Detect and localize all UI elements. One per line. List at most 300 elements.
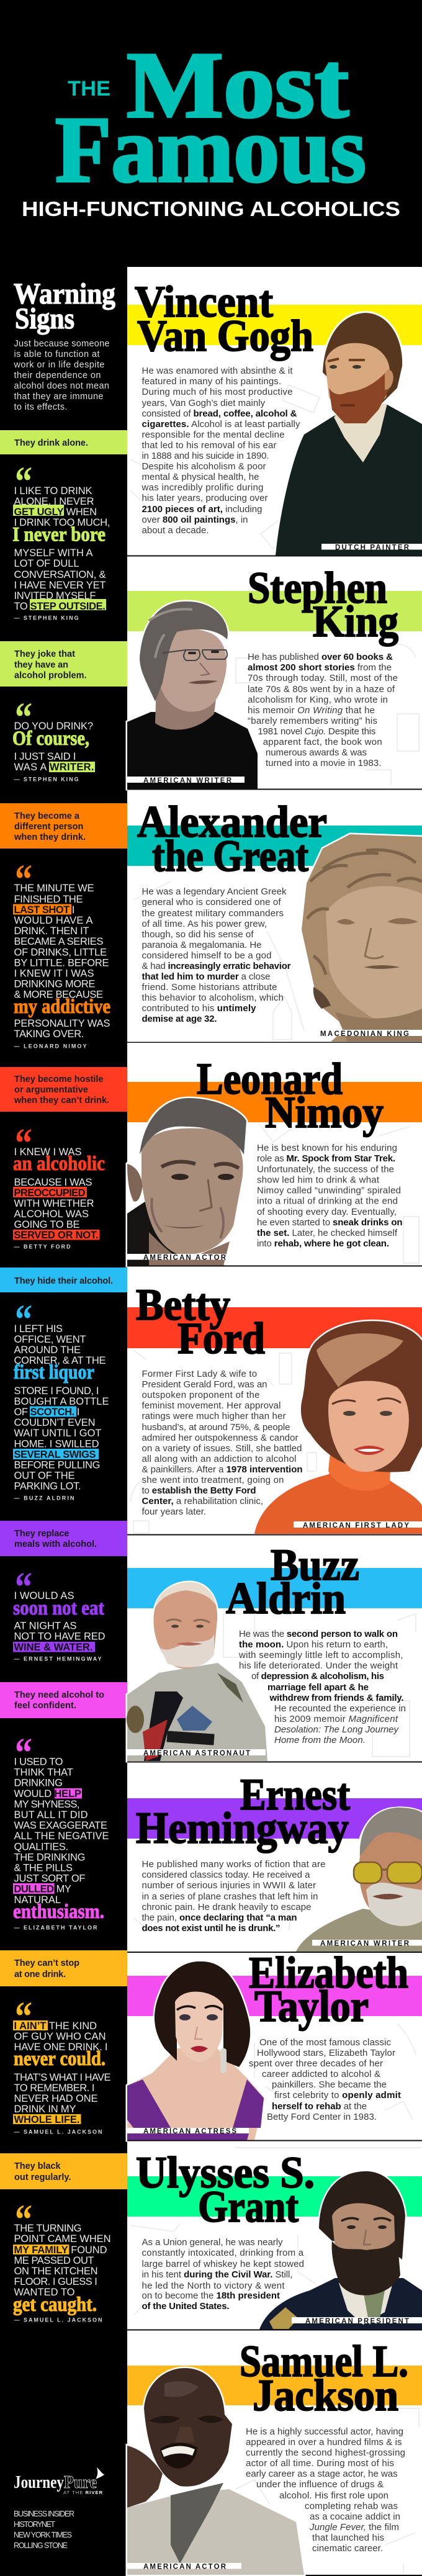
- text block: Grant bio: in his tent during the Civil War. Still,: [141, 2269, 293, 2280]
- sign 2: they joke: WAS A WRITER.: [14, 762, 94, 773]
- sign 6: replace meals: They replace: [14, 1529, 70, 1539]
- sign 3: different person: — LEONARD NIMOY: [14, 1043, 87, 1049]
- sign 4: hostile: an alcoholic: [13, 1153, 105, 1175]
- text block: Van Gogh bio: featured in many of his paintings.: [141, 376, 281, 387]
- sign 5: hide alcohol: I LEFT HIS: [14, 1323, 63, 1335]
- label: American astronaut: AMERICAN ASTRONAUT: [143, 1750, 250, 1757]
- sign 8: can't stop: I AIN’T THE KIND: [14, 2020, 97, 2032]
- sign 6: replace meals: “: [15, 1563, 32, 1610]
- label: Dutch painter: DUTCH PAINTER: [335, 544, 410, 551]
- sign 6: replace meals: meals with alcohol.: [14, 1539, 97, 1549]
- sources: BUSINESS INSIDER: [14, 2510, 74, 2518]
- panel: Leonard Nimoy: [127, 1043, 422, 1266]
- warning signs intro: Signs: [15, 302, 74, 335]
- text block: Aldrin bio: his life deteriorated. Under the weight: [239, 1660, 398, 1671]
- sign 4: hostile: GOING TO BE: [14, 1219, 79, 1230]
- sign 5: hide alcohol: “: [15, 1295, 32, 1343]
- panel: Leonard Nimoy: Nimoy: [265, 1088, 384, 1137]
- sign 7: need confidence: MY SHYNESS,: [14, 1799, 79, 1810]
- panel: Samuel L. Jackson: Jackson: [253, 2371, 398, 2420]
- logo: JourneyPure at the River: Pure: [64, 2472, 97, 2492]
- text block: Betty Ford bio: on a variety of issues. Still, she battled: [141, 1443, 302, 1454]
- text block: King bio: almost 200 short stories from the: [248, 662, 392, 673]
- text block: King bio: [248, 652, 398, 768]
- label: Macedonian king: MACEDONIAN KING: [320, 1030, 409, 1038]
- text block: Alexander bio: considered himself to be a god: [141, 950, 272, 961]
- text block: King bio: He has published over 60 books &: [248, 652, 393, 662]
- panel: Vincent Van Gogh: Vincent: [135, 277, 273, 327]
- text block: Aldrin bio: He recounted the experience in: [274, 1703, 406, 1714]
- sign 8: can't stop: THAT’S WHAT I HAVE: [14, 2072, 110, 2083]
- label: American first lady: AMERICAN FIRST LADY: [303, 1522, 409, 1529]
- text block: Alexander bio: the greatest military commanders: [141, 908, 284, 919]
- sign 3: different person: They become a: [14, 811, 80, 821]
- text block: Taylor bio: One of the most famous classic: [259, 2037, 391, 2048]
- sign 2: they joke: “: [15, 693, 32, 741]
- text block: Aldrin bio: He was the second person to walk on: [239, 1629, 398, 1639]
- text block: Grant bio: As a Union general, he was nearly: [141, 2237, 283, 2248]
- label: American actor: [127, 2563, 241, 2571]
- sign 7: need confidence: WOULD HELP: [14, 1788, 81, 1799]
- sign 1: they drink alone: TO STEP OUTSIDE.: [14, 601, 106, 612]
- panel: Alexander the Great: the Great: [152, 831, 308, 881]
- sign 1: they drink alone: ALONE. I NEVER: [14, 496, 94, 507]
- text block: Jackson bio: Jungle Fever, the film: [309, 2522, 399, 2533]
- panel: Samuel L. Jackson: [127, 2330, 422, 2575]
- sign 4: hostile: PREOCCUPIED: [14, 1187, 86, 1199]
- sign 9: black out: WANTED TO: [14, 2287, 75, 2298]
- text block: Jackson bio: cinematic career.: [312, 2543, 383, 2554]
- sign 9: black out: MY FAMILY FOUND: [14, 2245, 107, 2256]
- sign 1: they drink alone: I HAVE NEVER YET: [14, 580, 106, 591]
- sign 4: hostile: ALCOHOL WAS: [14, 1209, 89, 1220]
- text block: Jackson bio: He is a highly successful actor, having: [246, 2426, 403, 2437]
- text block: Aldrin bio: of depression & alcoholism, his: [251, 1671, 384, 1682]
- sign 1: they drink alone: I never bore: [12, 524, 106, 546]
- sign 4: hostile: I KNEW I WAS: [14, 1146, 82, 1158]
- text block: Jackson bio: currently the second highest-grossing: [246, 2448, 405, 2458]
- text block: Taylor bio: painkillers. She became the: [272, 2079, 387, 2090]
- panel: Betty Ford: [127, 1266, 422, 1536]
- title: Famous: [55, 97, 366, 202]
- text block: Aldrin bio: withdrew from friends & family.: [269, 1693, 403, 1703]
- text block: Grant bio: [141, 2237, 304, 2312]
- sign 9: black out: [0, 2153, 127, 2323]
- logo: JourneyPure at the River: Journey: [14, 2472, 64, 2492]
- sign 8: can't stop: OF GUY WHO CAN: [14, 2031, 106, 2042]
- panel: Ernest Hemingway: Hemingway: [136, 1803, 349, 1853]
- sign 2: they joke: Of course,: [12, 727, 89, 750]
- logo: JourneyPure at the River: AT THE RIVER: [63, 2490, 103, 2495]
- sign 4: hostile: BECAUSE I WAS: [14, 1177, 92, 1188]
- text block: Hemingway bio: considered classics today. He received a: [141, 1870, 310, 1880]
- text block: Van Gogh bio: years, Van Gogh’s diet mainly: [141, 398, 266, 408]
- text block: Betty Ford bio: President Gerald Ford, was an: [141, 1379, 267, 1390]
- sign 4: hostile: when they can’t drink.: [14, 1096, 109, 1106]
- text block: Taylor bio: career addicted to alcohol &: [262, 2069, 380, 2079]
- text block: Taylor bio: first celebrity to openly admit: [274, 2090, 401, 2101]
- sign 3: different person: BECAME A SERIES: [14, 936, 103, 947]
- text block: King bio: turned into a movie in 1983.: [266, 758, 381, 768]
- panel: Ulysses S. Grant: Grant: [198, 2182, 299, 2231]
- sign 6: replace meals: [0, 1521, 127, 1662]
- sign 8: can't stop: TO REMEMBER. I: [14, 2083, 94, 2094]
- text block: Alexander bio: of all time. As his power grew,: [141, 919, 267, 929]
- title: Most: [127, 33, 349, 137]
- sign 5: hide alcohol: COULDN’T EVEN: [14, 1417, 96, 1428]
- text block: Grant bio: constantly intoxicated, drinking from a: [141, 2248, 304, 2258]
- text block: Jackson bio: [246, 2426, 405, 2554]
- sign 9: black out: — SAMUEL L. JACKSON: [14, 2317, 102, 2323]
- text block: Aldrin bio: marriage fell apart & he: [267, 1682, 369, 1693]
- text block: Alexander bio: this behavior to alcoholism, which: [141, 993, 284, 1003]
- sign 4: hostile: SERVED OR NOT.: [14, 1230, 98, 1241]
- text block: Betty Ford bio: admired her outspokenness & candor: [141, 1433, 298, 1443]
- label: American actress: AMERICAN ACTRESS: [143, 2128, 236, 2135]
- portrait: Ulysses S. Grant: [259, 2171, 422, 2330]
- sign 8: can't stop: HAVE ONE DRINK. I: [14, 2042, 108, 2053]
- text block: Hemingway bio: He published many works of fiction that are: [141, 1859, 325, 1870]
- warning signs intro: alcohol does not mean: [14, 381, 109, 391]
- text block: Aldrin bio: the moon. Upon his return to earth,: [239, 1639, 388, 1650]
- sign 7: need confidence: THE DRINKING: [14, 1852, 86, 1863]
- text block: Nimoy bio: He is best known for his enduring: [257, 1143, 397, 1153]
- text block: Alexander bio: He was a legendary Ancient Greek: [141, 886, 287, 897]
- sign 9: black out: get caught.: [13, 2294, 97, 2316]
- text block: Hemingway bio: number of serious injuries in WWII & later: [141, 1880, 316, 1891]
- sources: NEW YORK TIMES: [14, 2531, 72, 2539]
- text block: Hemingway bio: [141, 1859, 325, 1934]
- text block: Betty Ford bio: feminist movement. Her approval: [141, 1400, 281, 1411]
- text block: Nimoy bio: Unfortunately, the success of the: [257, 1164, 394, 1174]
- text block: Nimoy bio: into rehab, where he got clean.: [257, 1238, 389, 1249]
- panel: Buzz Aldrin: [127, 1536, 422, 1763]
- panel: Stephen King: Stephen: [248, 563, 387, 613]
- portrait: Ernest Hemingway: [296, 1808, 422, 1952]
- label: American actor: AMERICAN ACTOR: [143, 2564, 227, 2571]
- text block: Van Gogh bio: Despite his alcoholism & poor: [141, 461, 266, 472]
- text block: Grant bio: of the United States.: [141, 2301, 230, 2312]
- text block: Nimoy bio: show led him to drink & what: [257, 1174, 380, 1186]
- sign 5: hide alcohol: OF SCOTCH. I: [14, 1407, 79, 1418]
- text block: Nimoy bio: Nimoy called “unwinding” spiraled: [257, 1186, 401, 1196]
- sign 6: replace meals: I WOULD AS: [14, 1590, 74, 1601]
- text block: Jackson bio: alcohol. His first role upon: [279, 2490, 388, 2501]
- text block: King bio: 70s through today. Still, most of the: [248, 673, 398, 683]
- text block: Aldrin bio: Home from the Moon.: [274, 1735, 366, 1745]
- label: American writer: AMERICAN WRITER: [320, 1940, 410, 1948]
- sign 5: hide alcohol: SEVERAL SWIGS: [14, 1449, 96, 1460]
- text block: Taylor bio: spent over three decades of her: [249, 2058, 383, 2069]
- text block: Alexander bio: though, so did his sense of: [141, 929, 254, 940]
- sign 5: hide alcohol: HOME. I SWILLED: [14, 1439, 99, 1450]
- text block: Aldrin bio: with seemingly little left to accomplish,: [238, 1650, 403, 1660]
- text block: Van Gogh bio: in 1888 and his suicide in 1890.: [141, 451, 269, 461]
- sign 7: need confidence: JUST SORT OF: [14, 1873, 86, 1885]
- sign 7: need confidence: & THE PILLS: [14, 1862, 73, 1873]
- text block: Alexander bio: contributed to his untimely: [141, 1003, 256, 1014]
- panel: Alexander the Great: [127, 790, 422, 1043]
- sign 6: replace meals: — ERNEST HEMINGWAY: [14, 1656, 102, 1662]
- portrait: Betty Ford: [254, 1321, 422, 1534]
- sources: [14, 2510, 74, 2550]
- text block: Jackson bio: appeared in over a hundred films & is: [246, 2437, 402, 2448]
- sign 5: hide alcohol: They hide their alcohol.: [14, 1276, 113, 1286]
- title: [22, 33, 400, 220]
- sign 5: hide alcohol: BEFORE PULLING: [14, 1460, 101, 1471]
- text block: Betty Ford bio: outspoken proponent of the: [141, 1390, 259, 1400]
- text block: King bio: 1981 novel Cujo. Despite this: [258, 726, 375, 737]
- sign 9: black out: out regularly.: [14, 2173, 71, 2182]
- sign 7: need confidence: THINK THAT: [14, 1767, 73, 1778]
- sign 5: hide alcohol: AROUND THE: [14, 1344, 81, 1356]
- sign 4: hostile: — BETTY FORD: [14, 1244, 71, 1250]
- panel: Ulysses S. Grant: Ulysses S.: [136, 2148, 315, 2197]
- text block: Jackson bio: as a cocaine addict in: [310, 2511, 400, 2522]
- sign 3: different person: THE MINUTE WE: [14, 883, 94, 894]
- warning signs intro: that they are immune: [14, 392, 103, 402]
- sign 7: need confidence: “: [15, 1729, 32, 1776]
- label: American writer: AMERICAN WRITER: [143, 777, 232, 785]
- text block: Jackson bio: actor of all time. During most of his: [246, 2458, 394, 2469]
- sign 8: can't stop: — SAMUEL L. JACKSON: [14, 2129, 102, 2135]
- sign 2: they joke: — STEPHEN KING: [14, 776, 78, 782]
- text block: Taylor bio: [249, 2037, 401, 2122]
- sign 3: different person: DRINK. THEN IT: [14, 925, 89, 937]
- text block: King bio: “barely remembers writing” his: [248, 716, 377, 726]
- text block: Aldrin bio: [238, 1629, 406, 1745]
- panel: Stephen King: King: [313, 597, 398, 646]
- text block: Alexander bio: that led him to murder a close: [141, 971, 271, 982]
- text block: Alexander bio: friend. Some historians attribute: [141, 982, 277, 993]
- sign 2: they joke: I JUST SAID I: [14, 751, 76, 762]
- sign 1: they drink alone: MYSELF WITH A: [14, 547, 93, 559]
- text block: Jackson bio: under the influence of drugs &: [256, 2479, 384, 2490]
- sign 8: can't stop: DRINK IN MY: [14, 2104, 76, 2115]
- sign 1: they drink alone: [0, 430, 127, 621]
- portrait: Samuel L. Jackson: [127, 2368, 304, 2575]
- portrait: Van Gogh: [276, 313, 422, 556]
- sign 3: different person: [0, 803, 127, 1049]
- panel: Ulysses S. Grant: [127, 2141, 422, 2330]
- text block: Van Gogh bio: [141, 366, 300, 536]
- text block: Hemingway bio: the pain, once declaring that “a man: [141, 1912, 297, 1923]
- text block: Van Gogh bio: He was enamored with absinthe & it: [141, 366, 293, 376]
- sign 2: they joke: alcohol problem.: [14, 670, 87, 680]
- panel: Betty Ford: Betty: [136, 1280, 230, 1330]
- sign 4: hostile: [0, 1067, 127, 1250]
- text block: King bio: late 70s & 80s went by in a haze of: [248, 684, 395, 695]
- panel: Alexander the Great: Alexander: [137, 797, 327, 847]
- sign 3: different person: “: [15, 855, 32, 903]
- panel: Leonard Nimoy: Leonard: [197, 1054, 343, 1104]
- sign 3: different person: I KNEW IT I WAS: [14, 968, 94, 980]
- panel: Ernest Hemingway: [127, 1763, 422, 1953]
- text block: Alexander bio: demise at age 32.: [141, 1014, 217, 1024]
- text block: Van Gogh bio: over 800 oil paintings, in: [141, 515, 248, 525]
- text block: Betty Ford bio: all along with an addiction to alcohol: [141, 1454, 297, 1464]
- sign 9: black out: They black: [14, 2161, 61, 2171]
- text block: Van Gogh bio: his later years, producing over: [141, 493, 268, 503]
- sign 5: hide alcohol: BOUGHT A BOTTLE: [14, 1396, 109, 1407]
- sign 8: can't stop: “: [15, 1993, 32, 2040]
- sign 1: they drink alone: LOT OF DULL: [14, 558, 79, 569]
- sign 9: black out: POINT CAME WHEN: [14, 2233, 110, 2245]
- text block: Hemingway bio: in a series of plane crashes that left him in: [141, 1891, 318, 1902]
- sign 3: different person: OF DRINKS, LITTLE: [14, 947, 107, 958]
- text block: Jackson bio: early career as a stage actor, he was: [246, 2469, 398, 2479]
- sign 7: need confidence: enthusiasm.: [13, 1901, 104, 1923]
- sign 7: need confidence: DRINKING: [14, 1778, 63, 1789]
- sign 1: they drink alone: — STEPHEN KING: [14, 615, 78, 621]
- sign 7: need confidence: QUALITIES.: [14, 1841, 68, 1852]
- sources: ROLLING STONE: [14, 2541, 68, 2550]
- sign 8: can't stop: They can’t stop: [14, 1958, 79, 1968]
- text block: Taylor bio: Hollywood stars, Elizabeth Taylor: [257, 2048, 395, 2058]
- panel: Elizabeth Taylor: Taylor: [254, 1981, 369, 2031]
- sign 5: hide alcohol: — BUZZ ALDRIN: [14, 1495, 74, 1501]
- text block: Alexander bio: [141, 886, 291, 1024]
- sign 8: can't stop: at one drink.: [14, 1970, 66, 1979]
- sign 5: hide alcohol: OUT OF THE: [14, 1470, 74, 1481]
- sign 8: can't stop: NEVER HAD ONE: [14, 2093, 98, 2104]
- sign 2: they joke: they have an: [14, 660, 68, 670]
- sign 3: different person: DRINKING MORE: [14, 978, 96, 989]
- sign 3: different person: LAST SHOT I: [14, 904, 74, 916]
- panel: Betty Ford: Ford: [177, 1313, 265, 1363]
- warning signs intro: [14, 277, 115, 412]
- sign 7: need confidence: [0, 1682, 127, 1930]
- sign 1: they drink alone: “: [15, 457, 32, 505]
- warning signs intro: their dependence on: [14, 371, 101, 381]
- text block: Betty Ford bio: husband’s, at around 75%, & people: [141, 1422, 290, 1433]
- text block: Van Gogh bio: that led to his removal of his ear: [141, 440, 277, 451]
- text block: Aldrin bio: his 2009 memoir Magnificent: [274, 1714, 398, 1724]
- text block: Van Gogh bio: mental & physical health, he: [141, 472, 259, 482]
- title: THE: [68, 77, 110, 101]
- warning signs intro: is able to function at: [14, 349, 99, 359]
- panel: Stephen King: [127, 556, 422, 790]
- sign 7: need confidence: They need alcohol to: [14, 1690, 104, 1700]
- text block: Alexander bio: general who is considered one of: [141, 897, 281, 907]
- portrait: Alexander statue: [302, 834, 422, 1042]
- sign 5: hide alcohol: CORNER, & AT THE: [14, 1355, 106, 1366]
- label: American writer: [127, 777, 245, 785]
- sign 1: they drink alone: CONVERSATION, &: [14, 569, 106, 580]
- sign 2: they joke: DO YOU DRINK?: [14, 721, 93, 732]
- sign 4: hostile: or argumentative: [14, 1085, 88, 1095]
- sign 9: black out: ON THE KITCHEN: [14, 2266, 98, 2277]
- sign 3: different person: different person: [14, 822, 83, 832]
- sign 6: replace meals: soon not eat: [13, 1597, 104, 1619]
- sign 5: hide alcohol: STORE I FOUND, I: [14, 1385, 99, 1397]
- text block: King bio: apparent fact, the book won: [263, 737, 382, 747]
- text block: King bio: his memoir On Writing that he: [248, 705, 375, 716]
- text block: Van Gogh bio: consisted of bread, coffee, alcohol &: [141, 408, 297, 419]
- text block: Van Gogh bio: was incredibly prolific during: [141, 482, 263, 493]
- text block: Betty Ford bio: four years later.: [141, 1506, 206, 1517]
- sign 7: need confidence: BUT ALL IT DID: [14, 1809, 88, 1821]
- sign 3: different person: FINISHED THE: [14, 894, 83, 905]
- sign 7: need confidence: feel confident.: [14, 1701, 76, 1711]
- text block: Jackson bio: that launched his: [312, 2533, 384, 2543]
- text block: King bio: numerous awards & was: [266, 747, 367, 758]
- text block: Jackson bio: completing rehab was: [305, 2501, 398, 2511]
- sign 1: they drink alone: I LIKE TO DRINK: [14, 485, 92, 497]
- panel: Ernest Hemingway: Ernest: [240, 1770, 350, 1819]
- sign 6: replace meals: WINE & WATER.: [14, 1642, 93, 1653]
- text block: Grant bio: he led the North to victory & went: [141, 2281, 285, 2291]
- warning signs intro: to its effects.: [14, 402, 67, 412]
- portrait: Stephen King: [127, 601, 258, 789]
- text block: Betty Ford bio: ratings were much higher than her: [141, 1411, 285, 1421]
- sign 4: hostile: WITH WHETHER: [14, 1198, 94, 1209]
- sign 1: they drink alone: They drink alone.: [14, 438, 88, 448]
- text block: Alexander bio: paranoia & megalomania. He: [141, 940, 262, 950]
- sign 3: different person: TAKING OVER.: [14, 1029, 84, 1040]
- text block: Betty Ford bio: to establish the Betty Ford: [141, 1485, 256, 1496]
- sign 8: can't stop: WHOLE LIFE.: [14, 2114, 79, 2125]
- sign 5: hide alcohol: PARKING LOT.: [14, 1481, 81, 1492]
- text block: Betty Ford bio: [141, 1369, 303, 1517]
- sign 7: need confidence: WAS EXAGGERATE: [14, 1820, 107, 1831]
- portrait: Buzz Aldrin: [127, 1582, 267, 1761]
- panel: Buzz Aldrin: Buzz: [271, 1540, 359, 1590]
- portrait: Elizabeth Taylor: [127, 1961, 266, 2140]
- text block: Grant bio: large barrel of whiskey he kept stowed: [141, 2259, 304, 2269]
- panel: Vincent Van Gogh: Van Gogh: [137, 311, 313, 361]
- sign 9: black out: “: [15, 2195, 32, 2243]
- sign 7: need confidence: — ELIZABETH TAYLOR: [14, 1924, 97, 1930]
- sign 1: they drink alone: GET UGLY WHEN: [14, 507, 97, 518]
- logo: JourneyPure at the River: [14, 2467, 105, 2495]
- text block: Alexander bio: & had increasingly erratic behavior: [141, 961, 291, 971]
- text block: Van Gogh bio: cigarettes. Alcohol is at least partially: [141, 419, 300, 430]
- sign 7: need confidence: NATURAL: [14, 1894, 61, 1906]
- sign 3: different person: PERSONALITY WAS: [14, 1018, 110, 1029]
- sign 8: can't stop: never could.: [14, 2048, 106, 2070]
- sign 3: different person: BY LITTLE. BEFORE: [14, 957, 109, 968]
- warning signs intro: Warning: [14, 277, 115, 310]
- label: American actor: AMERICAN ACTOR: [143, 1254, 227, 1261]
- text block: Van Gogh bio: During much of his most productive: [141, 387, 293, 397]
- sign 7: need confidence: ALL THE NEGATIVE: [14, 1831, 109, 1842]
- sign 5: hide alcohol: OFFICE, WENT: [14, 1334, 86, 1345]
- sign 7: need confidence: DULLED MY: [14, 1883, 71, 1894]
- sign 2: they joke: [0, 641, 127, 782]
- text block: Betty Ford bio: she went into treatment, going on: [141, 1475, 284, 1485]
- title: HIGH-FUNCTIONING ALCOHOLICS: [22, 197, 400, 220]
- label: American president: AMERICAN PRESIDENT: [305, 2318, 409, 2325]
- sign 6: replace meals: NOT TO HAVE RED: [14, 1631, 106, 1642]
- text block: Betty Ford bio: Center, a rehabilitation clinic,: [141, 1496, 263, 1506]
- text block: Betty Ford bio: Former First Lady & wife to: [141, 1369, 257, 1379]
- warning signs intro: work or in life despite: [14, 360, 104, 370]
- text block: Nimoy bio: the set. Later, he checked himself: [257, 1228, 398, 1238]
- text block: Nimoy bio: [257, 1143, 403, 1249]
- sign 5: hide alcohol: [0, 1268, 127, 1501]
- text block: Betty Ford bio: & painkillers. After a 1978 intervention: [141, 1464, 303, 1475]
- text block: Van Gogh bio: responsible for the mental decline: [141, 430, 284, 440]
- panel: Buzz Aldrin: Aldrin: [226, 1574, 346, 1623]
- text block: Taylor bio: herself to rehab at the: [272, 2101, 367, 2112]
- text block: Nimoy bio: he even started to sneak drinks on: [257, 1217, 403, 1228]
- sign 3: different person: & MORE BECAUSE: [14, 989, 103, 1001]
- text block: Nimoy bio: into a ritual of drinking at the end: [257, 1196, 398, 1207]
- sign 3: different person: when they drink.: [14, 832, 86, 842]
- text block: Taylor bio: Betty Ford Center in 1983.: [267, 2112, 377, 2122]
- text block: Nimoy bio: role as Mr. Spock from Star Trek.: [257, 1153, 395, 1164]
